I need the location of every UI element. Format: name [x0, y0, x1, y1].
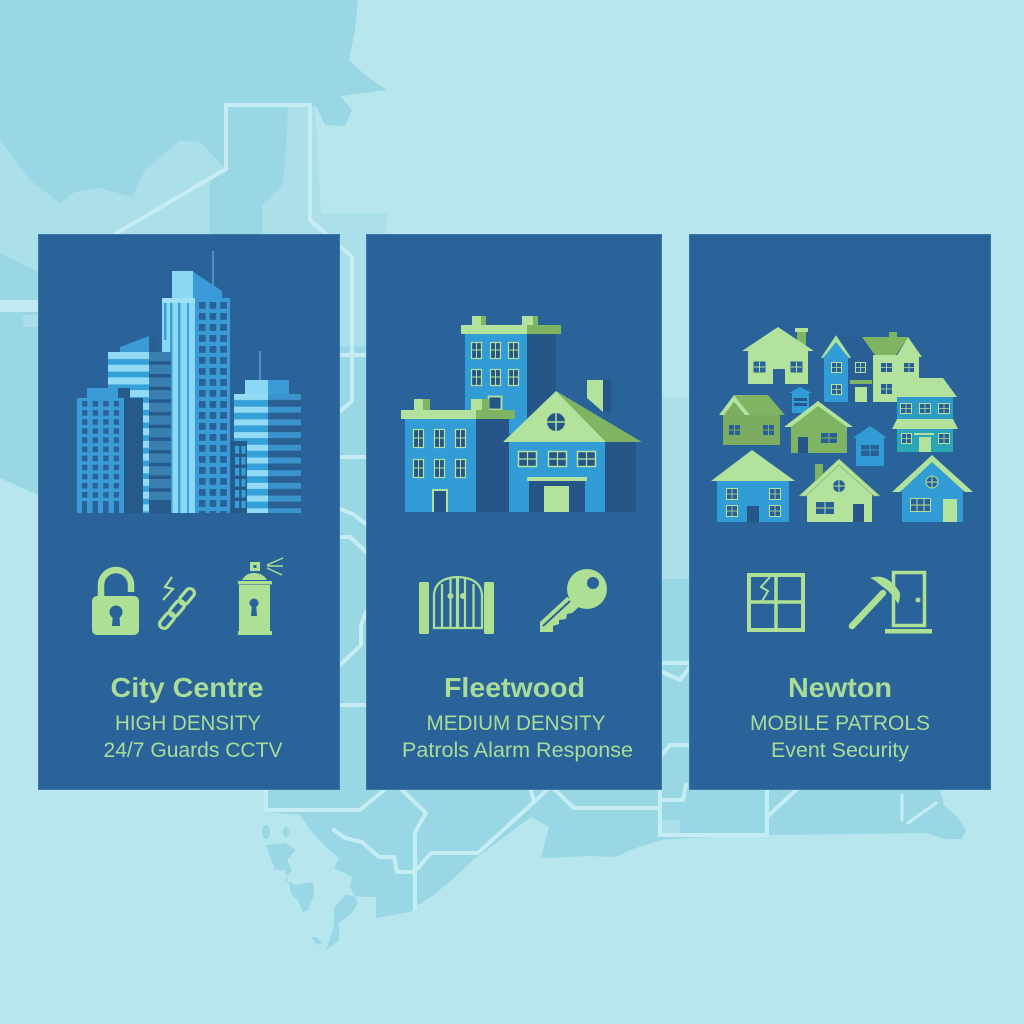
icon: gate [419, 577, 494, 634]
house: bottom centre [799, 459, 880, 522]
map: dark land centre [0, 234, 689, 790]
heading: Fleetwood: Fleetwood [444, 672, 585, 703]
label: high density: HIGH DENSITY [115, 712, 261, 735]
map: dark land inside the road loop [210, 105, 288, 240]
icon: broken chain [158, 577, 196, 630]
house: green left [719, 395, 785, 445]
panel: City Centre [38, 234, 340, 790]
house: green centre [784, 401, 853, 453]
icon: broken window [749, 575, 803, 630]
map: road network [0, 105, 936, 907]
panel: Newton [690, 234, 990, 790]
label: services: 24/7 Guards CCTV [104, 739, 282, 762]
house: top right two-storey [892, 378, 958, 452]
map: dark land south coast [268, 790, 966, 950]
illustration: mid-rise buildings and house [401, 316, 642, 512]
icon: key [540, 569, 607, 632]
map: offshore islands [262, 825, 322, 945]
label: medium density: MEDIUM DENSITY [426, 712, 606, 735]
icon: spray can [238, 558, 283, 635]
house: blue centre [853, 426, 887, 466]
map: pale districts [0, 106, 680, 835]
illustration: high-rise skyline [77, 251, 301, 513]
illustration: suburban houses [711, 327, 973, 522]
house: bottom right [892, 455, 973, 522]
panel: Fleetwood [366, 234, 662, 790]
house: bottom left [711, 450, 795, 522]
heading: City Centre: City Centre [110, 672, 264, 703]
label: services: Patrols Alarm Response [402, 739, 633, 762]
icon: hammer and door [852, 572, 932, 634]
house: top centre terrace [822, 332, 922, 402]
map: dark land north [0, 0, 387, 203]
label: mobile patrols: MOBILE PATROLS [750, 712, 930, 735]
house: top left [742, 327, 814, 384]
map: mid-tone land north [0, 105, 689, 590]
label: services: Event Security [771, 739, 909, 762]
icon: padlock [92, 570, 139, 635]
heading: Newton: Newton [788, 672, 892, 703]
house: small blue [789, 387, 812, 413]
